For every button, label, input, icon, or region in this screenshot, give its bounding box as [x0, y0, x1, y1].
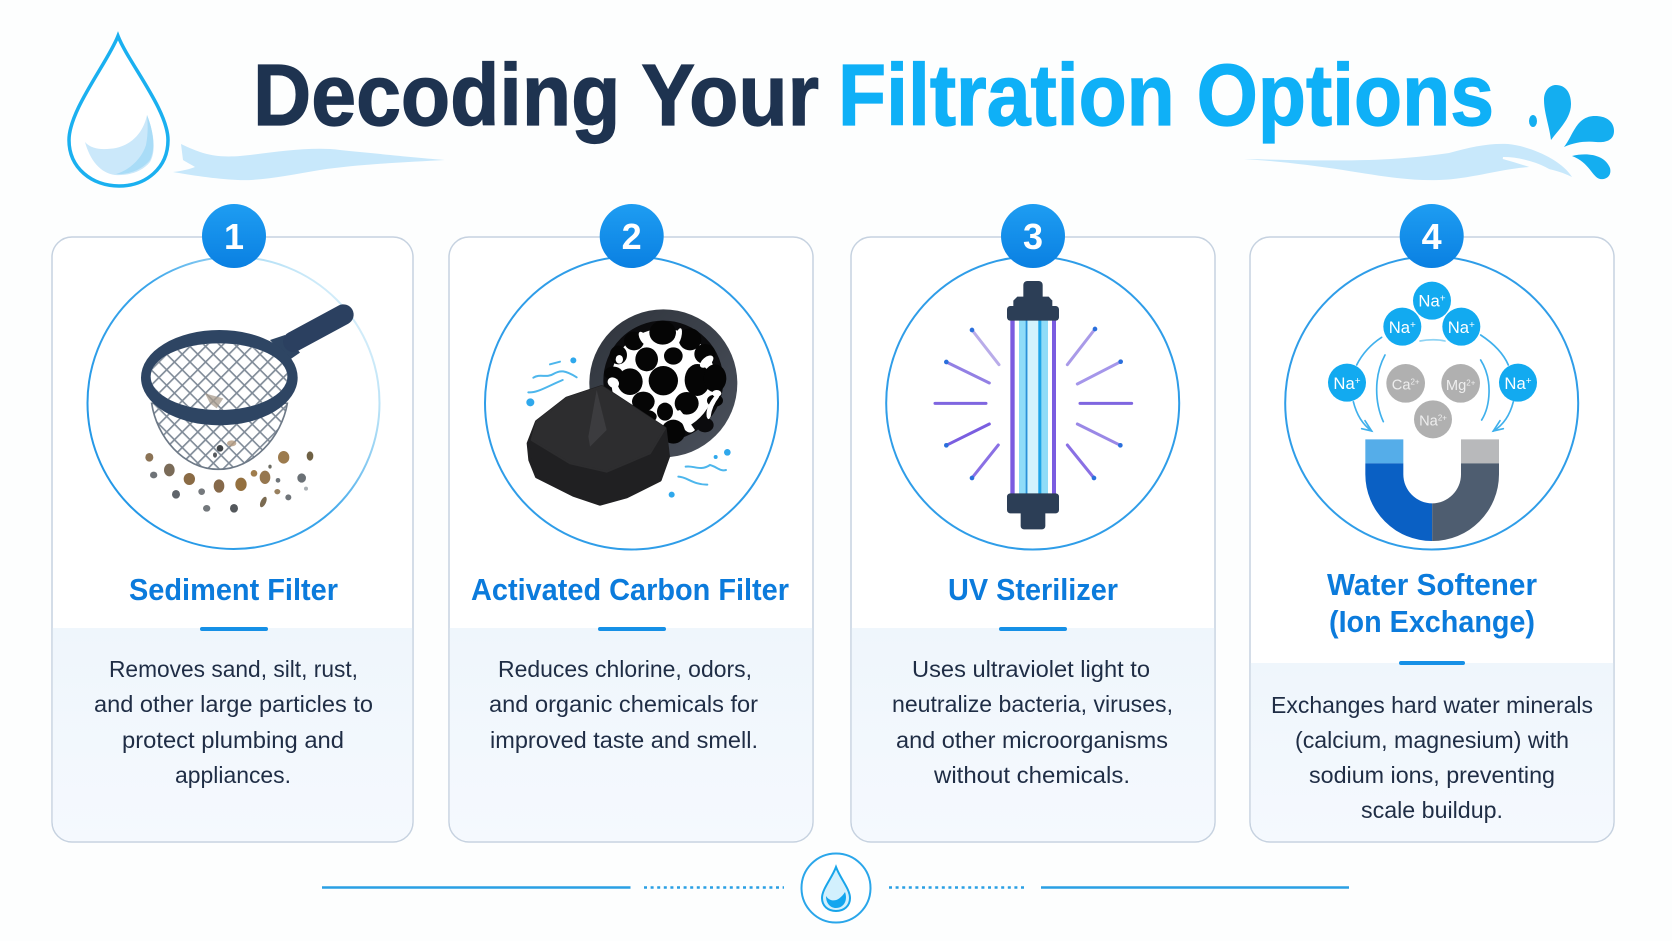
description: and other large particles to [94, 691, 373, 717]
description background [852, 628, 1214, 841]
description [94, 656, 373, 788]
description [489, 656, 758, 753]
description background [53, 628, 412, 841]
description: improved taste and smell. [490, 727, 758, 753]
card title: Water Softener [1327, 567, 1537, 602]
number badge [600, 204, 664, 268]
description: Exchanges hard water minerals [1271, 692, 1593, 718]
title: Filtration Options [838, 47, 1494, 144]
title underline [200, 627, 268, 631]
description [1271, 692, 1593, 823]
icon: ion exchange magnet: + [1526, 376, 1532, 387]
description: and organic chemicals for [489, 691, 758, 717]
card frame [52, 237, 413, 842]
description: protect plumbing and [122, 727, 344, 753]
title underline [999, 627, 1067, 631]
number badge [1400, 204, 1464, 268]
description: neutralize bacteria, viruses, [892, 691, 1173, 717]
icon: activated carbon [526, 309, 737, 504]
icon: ion exchange magnet: Na [1419, 413, 1438, 429]
description: appliances. [175, 762, 291, 788]
icon: ion exchange magnet [1328, 282, 1537, 541]
title underline [598, 627, 666, 631]
icon: ion exchange magnet: + [1410, 320, 1416, 331]
icon: water splash [1244, 85, 1614, 180]
title: Decoding Your [253, 47, 819, 144]
panel: UV sterilizer [851, 204, 1215, 842]
description: scale buildup. [1361, 797, 1503, 823]
description background [1251, 663, 1613, 841]
icon: ion exchange magnet: + [1355, 376, 1361, 387]
card frame [449, 237, 813, 842]
icon: ion exchange magnet: 2+ [1438, 414, 1447, 423]
icon: ion exchange magnet: Mg [1446, 378, 1466, 394]
icon: ion exchange magnet: Na [1418, 292, 1440, 311]
icon: UV lamp [935, 281, 1132, 529]
icon: ion exchange magnet: Na [1504, 374, 1526, 393]
card title: UV Sterilizer [948, 572, 1118, 607]
description: and other microorganisms [896, 727, 1168, 753]
description: sodium ions, preventing [1309, 762, 1555, 788]
icon: ion exchange magnet: 2+ [1410, 378, 1420, 387]
icon: mesh strainer with sediment [141, 315, 343, 513]
icon ring [88, 257, 380, 549]
number badge: 2 [622, 216, 642, 257]
number badge [1001, 204, 1065, 268]
card frame [1250, 237, 1614, 842]
icon: ion exchange magnet: Na [1333, 374, 1355, 393]
icon: ion exchange magnet: Na [1448, 318, 1469, 337]
icon: ion exchange magnet: 2+ [1466, 378, 1476, 387]
description: without chemicals. [933, 762, 1130, 788]
icon ring [886, 256, 1179, 550]
card title [1327, 567, 1537, 639]
number badge: 1 [224, 216, 244, 257]
icon: ion exchange magnet: Ca [1392, 377, 1410, 393]
icon: ion exchange magnet: + [1440, 294, 1446, 305]
footer ornament [322, 854, 1349, 922]
card title: Activated Carbon Filter [471, 572, 789, 607]
description: Removes sand, silt, rust, [109, 656, 358, 682]
icon ring [485, 256, 778, 550]
description background [450, 628, 812, 841]
description: Uses ultraviolet light to [912, 656, 1150, 682]
icon: small water drop [822, 867, 850, 911]
header [69, 36, 1614, 186]
description: Reduces chlorine, odors, [498, 656, 752, 682]
icon: ion exchange magnet: Na [1389, 318, 1410, 337]
number badge: 3 [1023, 216, 1043, 257]
description [892, 656, 1173, 788]
icon: water drop with swoosh [69, 36, 445, 186]
number badge [202, 204, 266, 268]
card frame [851, 237, 1215, 842]
icon: ion exchange magnet: + [1469, 320, 1475, 331]
number badge: 4 [1422, 216, 1442, 257]
card title: Sediment Filter [129, 572, 338, 607]
panel: water softener [1250, 204, 1614, 842]
title underline [1399, 661, 1465, 665]
description: (calcium, magnesium) with [1295, 727, 1569, 753]
panel: activated carbon filter [449, 204, 813, 842]
icon ring [1285, 256, 1578, 550]
panel: sediment filter [52, 204, 413, 842]
card title: (Ion Exchange) [1329, 604, 1535, 639]
